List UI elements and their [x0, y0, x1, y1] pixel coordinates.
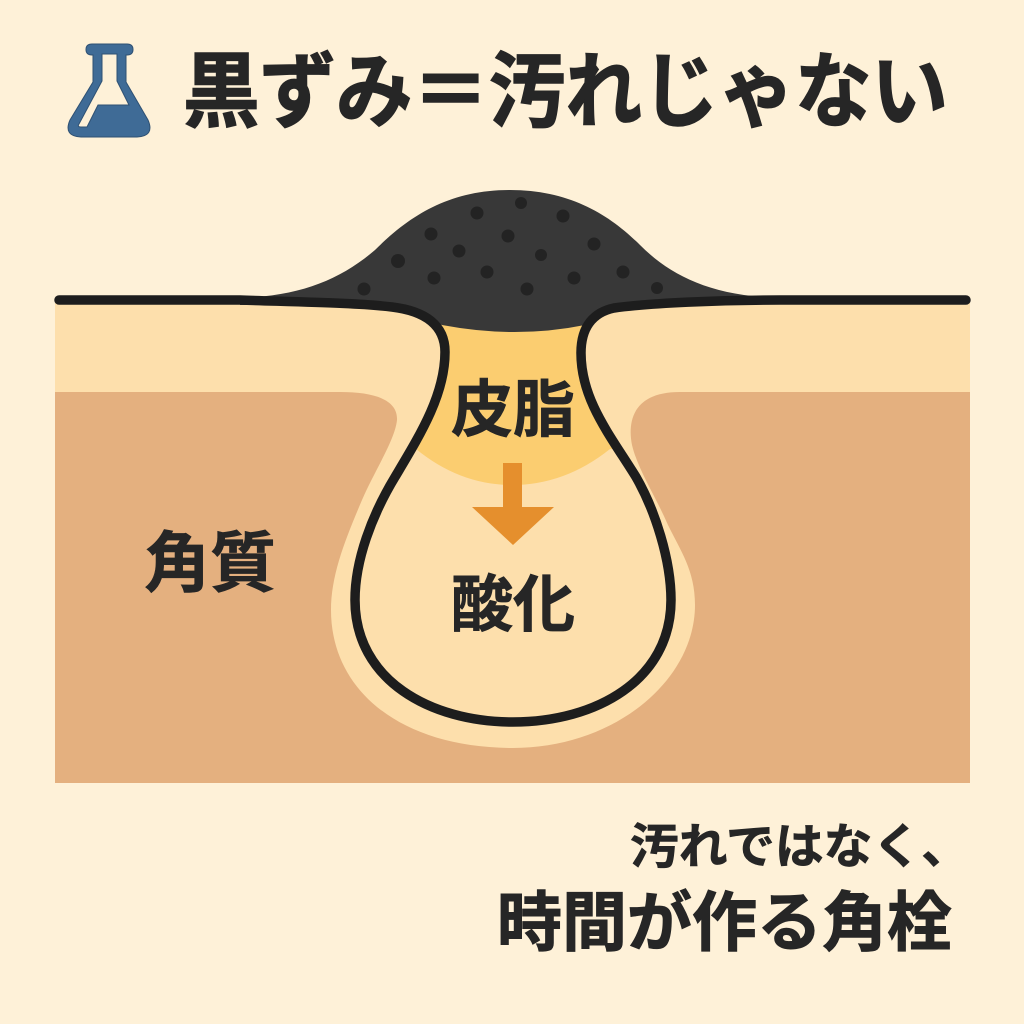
blackhead plug — [240, 190, 780, 332]
panel: skin cross-section — [55, 190, 970, 783]
closing line 1: 汚れではなく、 — [630, 821, 970, 874]
pore outline — [59, 300, 966, 722]
sebum — [416, 324, 612, 485]
title: 黒ずみ＝汚れじゃない — [183, 47, 948, 138]
icon: flask — [68, 44, 150, 137]
label: sebum: 皮脂 — [451, 376, 575, 445]
skin upper layer — [55, 300, 970, 783]
closing line 2: 時間が作る角栓 — [497, 886, 952, 959]
keratin layer — [55, 392, 970, 783]
arrow: oxidation — [472, 463, 554, 545]
label: keratin: 角質 — [144, 526, 276, 600]
label: oxidation: 酸化 — [451, 571, 575, 640]
